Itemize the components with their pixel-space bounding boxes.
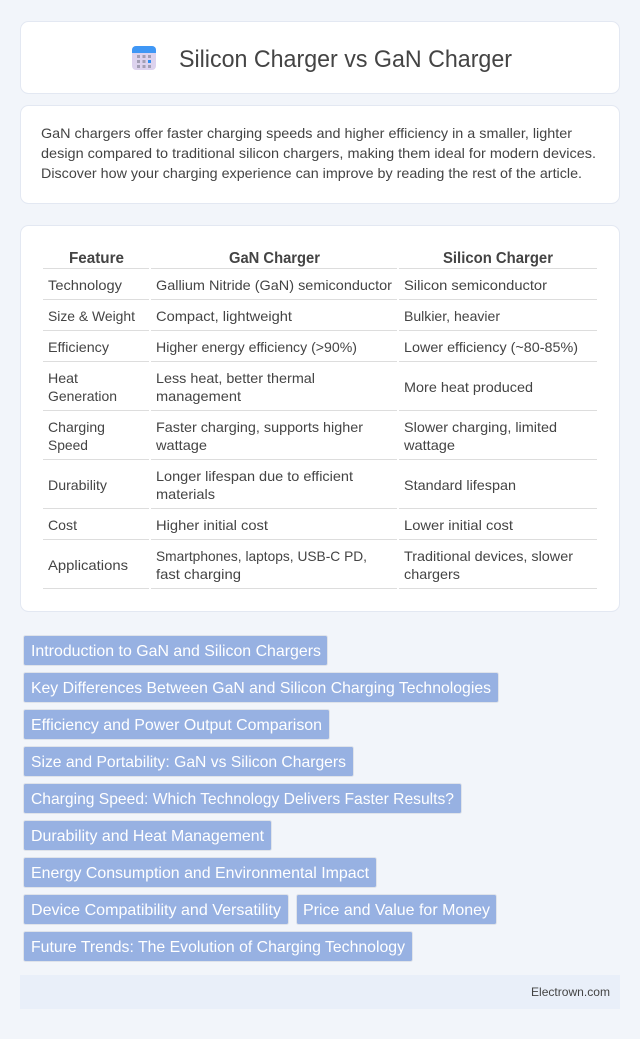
- chip: energy: Energy Consumption and Environmental Impact: [31, 865, 370, 882]
- row: size and weight: [48, 308, 500, 324]
- chip: charging speed: Charging Speed: Which Technology Delivers Faster Results?: [31, 791, 454, 808]
- chip: price: [296, 894, 496, 924]
- row: heat generation: Heat: [48, 370, 78, 386]
- row: technology: Gallium Nitride (GaN) semiconductor: [156, 277, 392, 293]
- row: charging speed: wattage: [155, 437, 207, 453]
- intro text: Discover how your charging experience can improve by reading the rest of the article.: [41, 165, 582, 181]
- row: heat generation: More heat produced: [404, 379, 533, 395]
- intro text: GaN chargers offer faster charging speeds and higher efficiency in a smaller, lighter: [41, 125, 572, 141]
- row: charging speed: wattage: [403, 437, 455, 453]
- icon: calendar grid: [132, 46, 156, 70]
- row: cost: Lower initial cost: [404, 517, 513, 533]
- chip: key differences: [24, 672, 498, 702]
- row: charging speed: [48, 419, 557, 453]
- chip: size and portability: Size and Portability: GaN vs Silicon Chargers: [31, 754, 346, 771]
- row: durability: [48, 468, 516, 502]
- row: applications: Traditional devices, slower: [404, 548, 573, 564]
- row: efficiency: Efficiency: [48, 339, 109, 355]
- table rules: [43, 268, 597, 589]
- chip: efficiency and power: [24, 710, 330, 740]
- row: efficiency: [48, 339, 578, 355]
- chip: introduction: Introduction to GaN and Silicon Chargers: [31, 643, 321, 660]
- topic links: [24, 636, 498, 962]
- chip: key differences: Key Differences Between GaN and Silicon Charging Technologies: [31, 680, 491, 697]
- row: cost: Higher initial cost: [156, 517, 268, 533]
- chip: compatibility: [24, 894, 288, 924]
- row: charging speed: Slower charging, limited: [404, 419, 557, 435]
- row: durability: Standard lifespan: [404, 477, 516, 493]
- panel: introduction: [20, 106, 620, 204]
- table header: Silicon Charger: [443, 250, 553, 267]
- row: size and weight: Bulkier, heavier: [404, 308, 500, 324]
- table header: Feature: [69, 250, 124, 267]
- row: durability: Longer lifespan due to efficient: [156, 468, 353, 484]
- row: applications: Smartphones, laptops, USB-C PD,: [156, 548, 367, 564]
- row: charging speed: Faster charging, supports higher: [156, 419, 363, 435]
- chip: durability: Durability and Heat Management: [31, 828, 265, 845]
- chip: compatibility: Device Compatibility and Versatility: [31, 902, 281, 919]
- row: applications: Applications: [48, 557, 128, 573]
- chip: future trends: [24, 932, 412, 962]
- intro text: [41, 125, 596, 181]
- row: size and weight: Compact, lightweight: [156, 308, 292, 324]
- chip: price: Price and Value for Money: [303, 902, 490, 919]
- row: size and weight: Size & Weight: [48, 308, 135, 324]
- chip: energy: [24, 858, 376, 888]
- chip: durability: [24, 820, 272, 850]
- table header: GaN Charger: [229, 250, 320, 267]
- chip: introduction: [24, 636, 328, 666]
- table header: [69, 250, 553, 267]
- row: durability: materials: [156, 486, 215, 502]
- chip: future trends: Future Trends: The Evolution of Charging Technology: [31, 939, 405, 956]
- row: charging speed: Charging: [48, 419, 105, 435]
- row: heat generation: Generation: [48, 388, 117, 404]
- row: efficiency: Higher energy efficiency (>90%): [156, 339, 357, 355]
- footer: Electrown.com: [531, 985, 610, 999]
- title: Silicon Charger vs GaN Charger: [179, 46, 512, 73]
- row: efficiency: Lower efficiency (~80-85%): [404, 339, 578, 355]
- row: applications: [48, 548, 573, 582]
- row: heat generation: Less heat, better thermal: [156, 370, 315, 386]
- header panel: [20, 22, 620, 94]
- chip: size and portability: [24, 746, 354, 776]
- row: cost: [48, 517, 513, 533]
- row: heat generation: management: [156, 388, 241, 404]
- row: heat generation: [48, 370, 533, 404]
- row: technology: Technology: [48, 277, 122, 293]
- row: durability: Durability: [48, 477, 107, 493]
- row: applications: fast charging: [156, 566, 241, 582]
- chip: charging speed: [24, 784, 462, 814]
- footer: [20, 975, 620, 1009]
- row: applications: chargers: [404, 566, 460, 582]
- intro text: design compared to traditional silicon chargers, making them ideal for modern devices.: [41, 145, 596, 161]
- row: technology: [48, 277, 547, 293]
- chip: efficiency and power: Efficiency and Power Output Comparison: [31, 717, 322, 734]
- panel: comparison table: [20, 226, 620, 612]
- row: cost: Cost: [48, 517, 77, 533]
- row: charging speed: Speed: [48, 437, 88, 453]
- row: technology: Silicon semiconductor: [404, 277, 547, 293]
